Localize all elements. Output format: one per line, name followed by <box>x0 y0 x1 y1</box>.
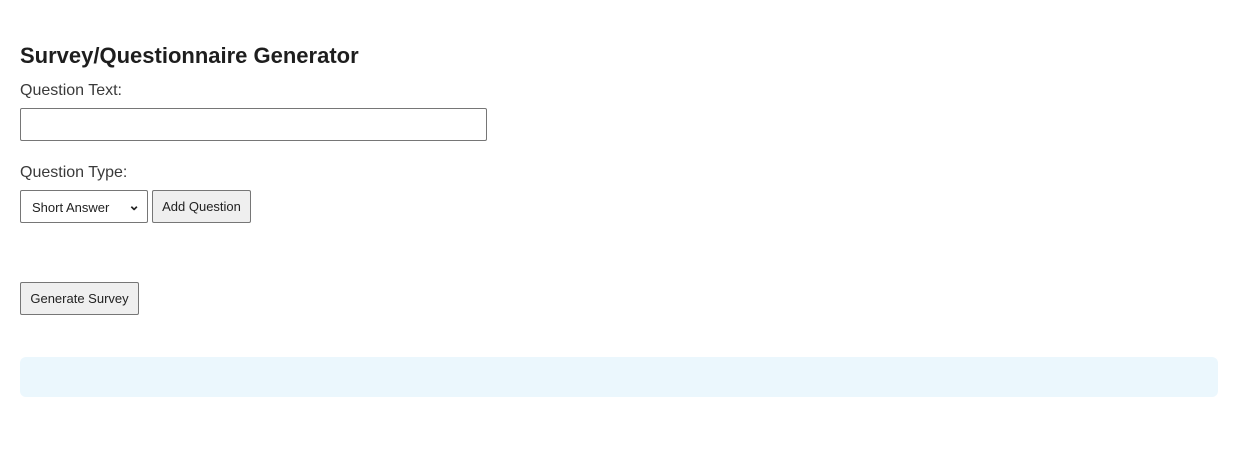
button: add question <box>152 190 251 223</box>
button: generate survey: Generate Survey <box>30 291 129 306</box>
title: Survey/Questionnaire Generator <box>20 43 359 68</box>
select: question type: ⌄ <box>128 197 140 213</box>
select: question type: Short Answer <box>32 200 109 215</box>
output panel <box>20 357 1218 397</box>
label: question text: Question Text: <box>20 82 122 99</box>
label: question type: Question Type: <box>20 164 127 181</box>
button: generate survey <box>20 282 139 315</box>
button: add question: Add Question <box>162 199 241 214</box>
input: question text <box>20 108 487 141</box>
select: question type <box>20 190 148 223</box>
